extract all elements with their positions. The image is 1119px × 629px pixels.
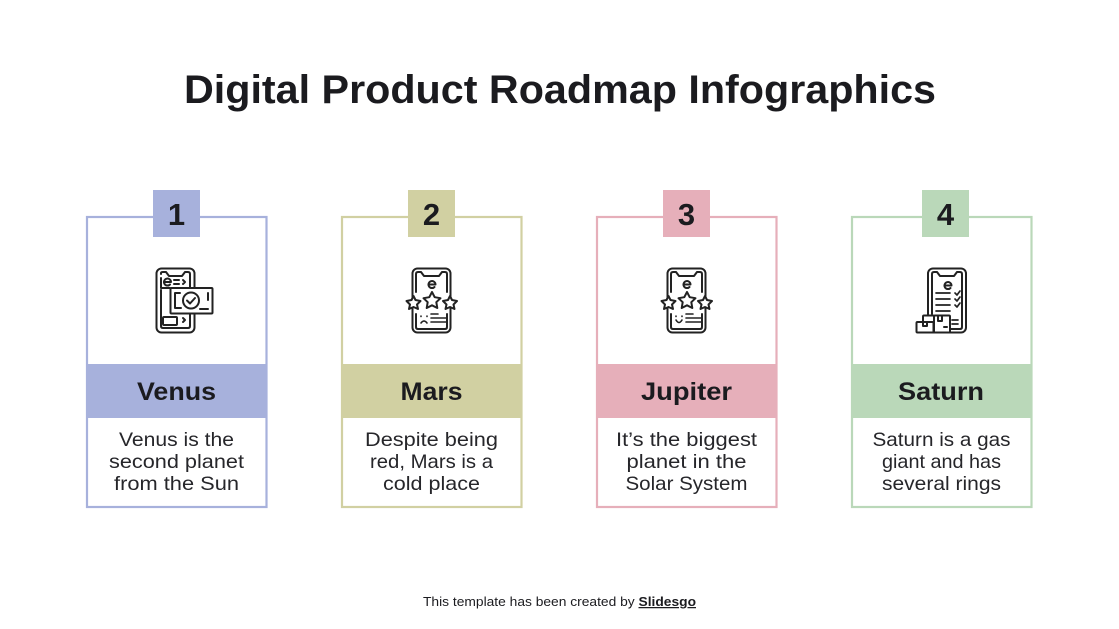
description [109, 429, 245, 495]
number badge 1 [153, 190, 200, 237]
panel: Jupiter [596, 190, 778, 507]
card frame [852, 217, 1032, 507]
name band [341, 364, 522, 418]
panel: Venus [86, 190, 268, 507]
number badge 4 [922, 190, 969, 237]
description: from the Sun [114, 473, 239, 495]
name band: Venus [137, 378, 216, 406]
name band: Mars [400, 378, 462, 406]
description: cold place [383, 473, 480, 495]
description: Solar System [626, 473, 748, 495]
title: Digital Product Roadmap Infographics [184, 68, 936, 112]
name band: Saturn [898, 378, 984, 406]
number badge 2: 2 [423, 197, 440, 232]
number badge 2 [408, 190, 455, 237]
icon: phone with stars and smile [662, 268, 712, 332]
description: Despite being [365, 429, 498, 451]
description: red, Mars is a [370, 451, 493, 473]
description: It’s the biggest [616, 429, 758, 451]
card frame [342, 217, 522, 507]
card frame [87, 217, 266, 507]
footer credit: This template has been created by Slidesgo [423, 595, 696, 609]
number badge 3: 3 [678, 197, 695, 232]
card frame [597, 217, 776, 507]
icon: phone with stars and sad face [406, 268, 457, 332]
name band [596, 364, 778, 418]
description: Venus is the [119, 429, 234, 451]
panel: Saturn [851, 190, 1032, 507]
number badge 3 [663, 190, 710, 237]
description [365, 429, 498, 495]
icon: phone with banknote [156, 268, 212, 332]
name band [86, 364, 268, 418]
name band [851, 364, 1032, 418]
number badge 4: 4 [937, 197, 955, 232]
number badge 1: 1 [168, 197, 185, 232]
description: planet in the [626, 451, 746, 473]
description: second planet [109, 451, 245, 473]
description: several rings [882, 473, 1001, 495]
icon: phone with checklist and boxes [916, 268, 966, 332]
description [872, 429, 1011, 495]
name band: Jupiter [641, 378, 732, 406]
description [616, 429, 758, 495]
description: Saturn is a gas [872, 429, 1011, 451]
panel: Mars [341, 190, 522, 507]
description: giant and has [882, 451, 1001, 473]
